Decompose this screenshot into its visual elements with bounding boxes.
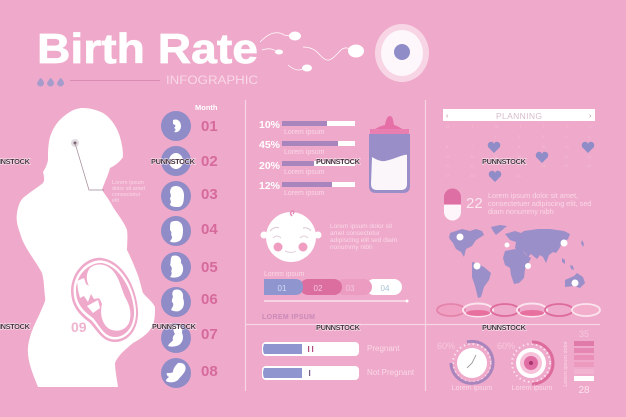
callout: elit bbox=[112, 198, 120, 204]
calendar dates: 10 bbox=[541, 144, 546, 149]
calendar header bbox=[443, 109, 595, 121]
bar scale: Lorem ipsum dolor bbox=[563, 341, 569, 387]
gauge: target: 60% bbox=[497, 341, 515, 351]
step 02 bbox=[300, 279, 342, 295]
calendar dates: 2 bbox=[518, 134, 521, 139]
calendar dates: S bbox=[566, 124, 569, 129]
calendar dates: T bbox=[471, 124, 474, 129]
month 02 bbox=[161, 146, 218, 176]
bar 20% bbox=[259, 160, 355, 176]
chain bbox=[437, 304, 600, 316]
gauge: target: Lorem ipsum bbox=[512, 385, 552, 392]
pregnancy tests bbox=[262, 342, 415, 380]
calendar dates: 16 bbox=[517, 154, 522, 159]
test: not pregnant bbox=[262, 366, 415, 380]
calendar dates: 15 bbox=[493, 154, 498, 159]
calendar dates: 9 bbox=[518, 144, 521, 149]
title: Birth Rate bbox=[37, 25, 258, 72]
text block: pill: Lorem ipsum dolor sit amet, bbox=[488, 191, 578, 200]
step progress: Lorem ipsum bbox=[264, 271, 305, 278]
gauge: clock: Lorem ipsum bbox=[452, 385, 492, 392]
calendar dates: F bbox=[543, 124, 546, 129]
watermarks: PUNNSTOCK bbox=[152, 322, 197, 331]
bar scale: 35 bbox=[579, 329, 589, 339]
text block: baby: amet consectetur bbox=[330, 230, 381, 237]
month 03: 03 bbox=[201, 186, 218, 203]
number 22: 22 bbox=[466, 195, 483, 212]
text block: baby: adipiscing elit sed diam bbox=[330, 237, 397, 244]
test: not pregnant: Not Pregnant bbox=[367, 368, 415, 377]
calendar header: › bbox=[589, 113, 592, 120]
bar 45% bbox=[259, 139, 355, 156]
calendar dates: 7 bbox=[471, 144, 474, 149]
month 01 bbox=[161, 111, 218, 141]
calendar dates: T bbox=[519, 124, 522, 129]
watermarks bbox=[0, 157, 527, 332]
text block: baby bbox=[330, 223, 397, 251]
icon: baby face bbox=[260, 211, 322, 262]
world map bbox=[449, 225, 585, 298]
map pins bbox=[456, 234, 578, 286]
watermarks: PUNNSTOCK bbox=[151, 157, 196, 166]
label: month 09: 09 bbox=[71, 319, 87, 335]
step 02: 02 bbox=[314, 284, 323, 293]
calendar dates: 25 bbox=[564, 163, 569, 168]
bar 10% bbox=[259, 119, 355, 136]
calendar dates: 19 bbox=[587, 154, 592, 159]
calendar dates: S bbox=[589, 124, 592, 129]
silhouette bbox=[17, 108, 155, 387]
step progress bbox=[264, 271, 408, 302]
icon: sperm bbox=[260, 32, 364, 72]
test: pregnant: Pregnant bbox=[367, 344, 400, 353]
gauge: clock bbox=[437, 341, 493, 392]
calendar dates: 18 bbox=[564, 154, 569, 159]
bar scale: 28 bbox=[578, 385, 590, 396]
month 07: 07 bbox=[201, 326, 218, 343]
calendar dates: 27 bbox=[445, 173, 450, 178]
step 03: 03 bbox=[346, 284, 355, 293]
calendar dates: 21 bbox=[470, 163, 475, 168]
month 08 bbox=[161, 358, 218, 388]
icon: baby bottle bbox=[369, 116, 410, 193]
step 04: 04 bbox=[381, 284, 390, 293]
calendar dates: 26 bbox=[587, 163, 592, 168]
gauge: target bbox=[497, 341, 553, 392]
callout: consectetur bbox=[112, 192, 141, 198]
month 04: 04 bbox=[201, 221, 218, 238]
watermarks: PUNNSTOCK bbox=[482, 323, 527, 332]
calendar hearts bbox=[488, 142, 594, 182]
month 02: 02 bbox=[201, 153, 218, 170]
bar 10%: 10% bbox=[259, 119, 281, 131]
heading: lorem ipsum: LOREM IPSUM bbox=[262, 314, 315, 321]
subtitle: INFOGRAPHIC bbox=[166, 75, 258, 87]
watermarks: PUNNSTOCK bbox=[482, 157, 527, 166]
calendar dates: 13 bbox=[445, 154, 450, 159]
text block: pill bbox=[488, 191, 591, 216]
gauge: clock: 60% bbox=[437, 341, 455, 351]
bar 12%: Lorem ipsum bbox=[284, 190, 325, 197]
bar 20%: 20% bbox=[259, 160, 281, 172]
bar 20%: Lorem ipsum bbox=[284, 169, 325, 176]
callout: Lorem ipsum bbox=[112, 180, 144, 186]
bar 45%: 45% bbox=[259, 139, 281, 151]
icon: egg cell bbox=[375, 24, 429, 82]
calendar dates: 28 bbox=[470, 173, 475, 178]
calendar header: ‹ bbox=[446, 113, 449, 120]
watermarks: PUNNSTOCK bbox=[316, 157, 361, 166]
list: months bbox=[161, 111, 218, 388]
subtitle bbox=[37, 75, 258, 87]
text block: baby: Lorem ipsum dolor sit bbox=[330, 223, 392, 230]
month 06: 06 bbox=[201, 291, 218, 308]
calendar dates: 4 bbox=[565, 134, 568, 139]
month 07 bbox=[161, 323, 218, 353]
callout: dolor sit amet bbox=[112, 186, 145, 192]
calendar bbox=[443, 109, 595, 182]
calendar dates: 23 bbox=[517, 163, 522, 168]
step 01: 01 bbox=[278, 284, 287, 293]
womb with fetus bbox=[71, 258, 138, 342]
month 04 bbox=[161, 216, 218, 246]
bar 12%: 12% bbox=[259, 180, 281, 192]
calendar dates: 30 bbox=[517, 173, 522, 178]
test: pregnant bbox=[262, 342, 400, 356]
callout bbox=[71, 139, 145, 204]
bar scale bbox=[563, 329, 594, 396]
pill bbox=[444, 188, 461, 220]
panel: pregnant silhouette bbox=[17, 108, 155, 387]
panel: percentage bars bbox=[259, 119, 355, 197]
step 01 bbox=[264, 279, 303, 295]
watermarks: PUNNSTOCK bbox=[316, 323, 361, 332]
text block: pill: diam nonummy nibh bbox=[488, 207, 554, 216]
calendar dates: 6 bbox=[446, 144, 449, 149]
heading: month: Month bbox=[195, 103, 218, 112]
month 06 bbox=[161, 287, 218, 317]
month 05 bbox=[161, 252, 218, 282]
bar 12% bbox=[259, 180, 355, 197]
calendar dates: 24 bbox=[541, 163, 546, 168]
calendar dates: 3 bbox=[542, 134, 545, 139]
month 05: 05 bbox=[201, 259, 218, 276]
month 08: 08 bbox=[201, 363, 218, 380]
month 03 bbox=[161, 181, 218, 211]
calendar dates: 14 bbox=[470, 154, 475, 159]
bar 10%: Lorem ipsum bbox=[284, 129, 325, 136]
bar 45%: Lorem ipsum bbox=[284, 149, 325, 156]
text block: baby: nonummy nibh bbox=[330, 244, 373, 251]
calendar header: PLANNING bbox=[496, 111, 542, 121]
month 01: 01 bbox=[201, 118, 218, 135]
step 04 bbox=[366, 279, 402, 295]
calendar dates: 20 bbox=[445, 163, 450, 168]
text block: pill: consectetuer adipiscing elit, sed bbox=[488, 199, 591, 208]
calendar dates: 1 bbox=[494, 134, 497, 139]
calendar dates: 11 bbox=[565, 144, 570, 149]
calendar dates: M bbox=[446, 124, 449, 129]
step 03 bbox=[336, 279, 372, 295]
calendar dates: W bbox=[495, 124, 499, 129]
calendar dates: 5 bbox=[588, 134, 591, 139]
calendar dates bbox=[445, 124, 592, 178]
